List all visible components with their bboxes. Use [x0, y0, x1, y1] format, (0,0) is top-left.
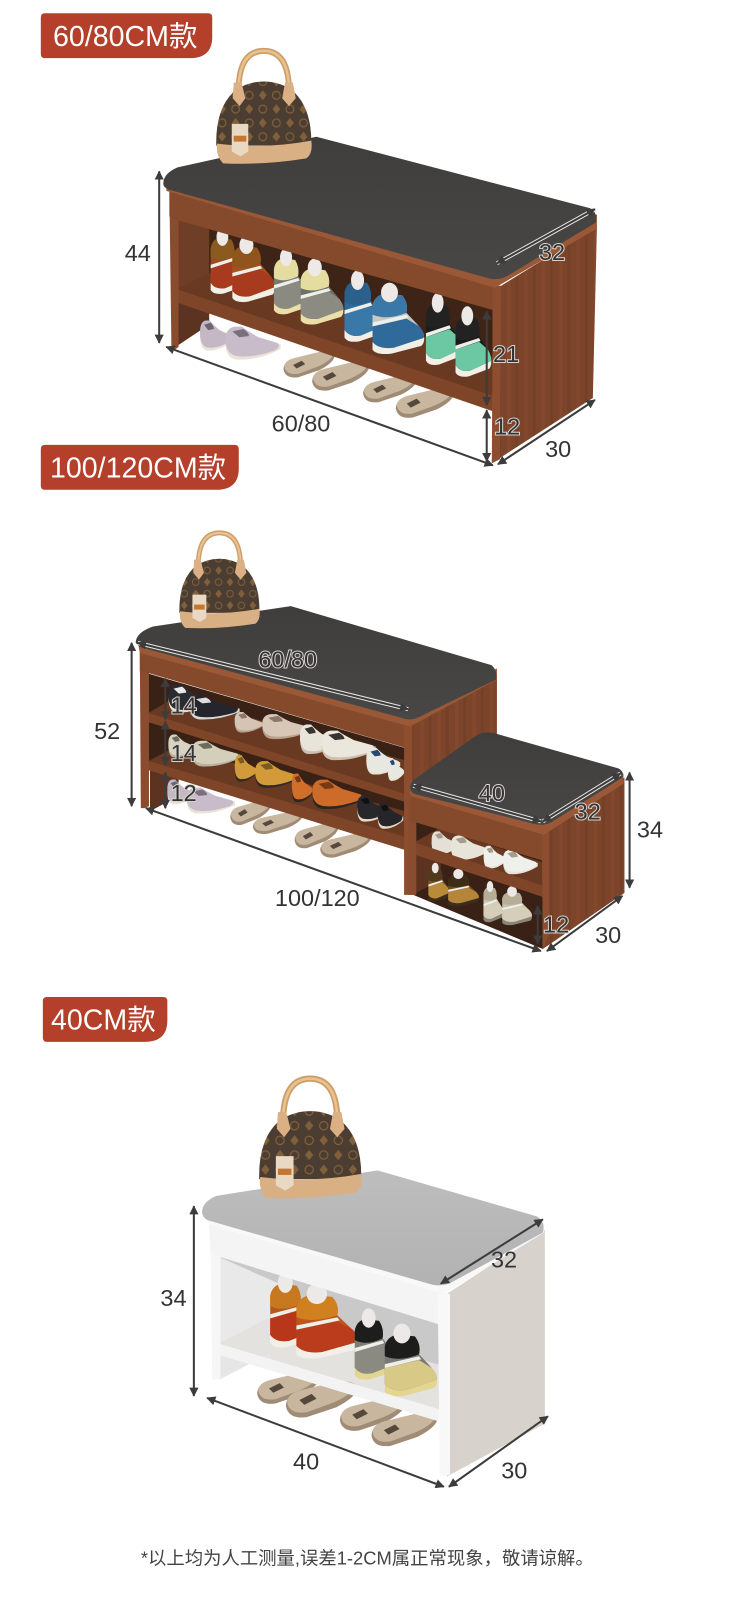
handbag 2: [179, 533, 260, 628]
handbag 1: [216, 51, 312, 164]
dimension: 14 middle: [165, 721, 197, 766]
dimension: 32 seat: 32: [539, 239, 565, 265]
dimension: 21: 21: [493, 341, 519, 367]
dimension: 12: [487, 410, 520, 461]
stool apron: [410, 794, 545, 861]
dimension: 30: 30: [501, 1458, 527, 1484]
side panel: [408, 676, 497, 816]
divider post: [404, 722, 412, 895]
stool interior: [413, 811, 543, 949]
apron: [169, 191, 497, 311]
badge: 60/80CM款: [41, 13, 212, 58]
shelf front: [216, 1343, 439, 1421]
dimension: 100/120: [146, 808, 541, 951]
seat trim: [166, 182, 597, 288]
bench: 40cm white: [202, 1170, 545, 1477]
dimension: 34: 34: [160, 1285, 187, 1311]
interior back: [148, 673, 405, 839]
side panel: [447, 1230, 545, 1477]
dimension: 30 side: 30: [545, 436, 571, 462]
stool left post: [408, 794, 416, 895]
badge: 100/120CM款: [41, 445, 239, 490]
dimension: 44: 44: [125, 240, 151, 266]
dimension: 12 bottom: 12: [171, 780, 197, 806]
stool shelf front: [413, 842, 543, 897]
seat cushion: [202, 1170, 544, 1285]
dimension: 12 stool: [538, 906, 569, 944]
dimension: 32: 32: [491, 1246, 517, 1272]
shoes: [167, 685, 404, 858]
dimension: 30 stool: [547, 896, 622, 951]
dimension: 32 stool seat: 32: [575, 798, 601, 824]
dimension: 60/80: 60/80: [272, 411, 330, 437]
dimension: 32 stool seat: [543, 773, 620, 824]
badge: 60/80CM款: 60/80CM款: [53, 21, 198, 53]
left post: [140, 647, 149, 808]
front post: [438, 1294, 450, 1477]
shoes under shelf: [200, 320, 454, 418]
dimension: 12 stool: 12: [543, 912, 569, 938]
stool side: [543, 778, 624, 949]
stool trim: [410, 773, 623, 835]
stool shoes: [428, 831, 538, 925]
dimension: 12 bottom: [165, 772, 197, 808]
stool cushion: [410, 732, 623, 825]
dimension: 30 side: [498, 400, 595, 464]
dimension: 34 stool: 34: [637, 817, 663, 843]
dimension: 60/80 seat: [138, 643, 408, 709]
left inner side: [176, 212, 209, 291]
back interior: [219, 1250, 441, 1406]
dimension: 40: [207, 1398, 444, 1487]
seat rim: [203, 1214, 544, 1294]
badge: 100/120CM款: 100/120CM款: [50, 453, 226, 485]
shelf surfaces: [148, 697, 405, 795]
seat cushion: [163, 137, 596, 279]
shelf surface: [176, 272, 493, 400]
dimension: 60/80 seat: 60/80: [258, 646, 317, 672]
shoes: [257, 1272, 438, 1446]
dimension: 21: [487, 311, 519, 405]
apron: [140, 647, 406, 748]
stool front post: [542, 833, 549, 949]
dimension: 60/80: [166, 347, 493, 465]
dimension: 14 top: [165, 679, 197, 719]
dimension: 40 seat: 40: [479, 780, 505, 806]
shelf front: [176, 289, 493, 411]
shoes upper row: [211, 228, 491, 377]
back interior: [179, 214, 493, 398]
inner left: [219, 1257, 284, 1347]
shelf surface: [216, 1316, 441, 1410]
bench: 60/80cm: [163, 137, 597, 463]
dimension: 40: 40: [293, 1448, 319, 1474]
dimension: 32: [441, 1219, 543, 1284]
dimension: 30: [449, 1416, 548, 1487]
dimension: 30 stool: 30: [595, 922, 621, 948]
badge: 40CM款: 40CM款: [51, 1005, 156, 1037]
shelf fronts: [146, 712, 405, 802]
lower inner left: [219, 1353, 270, 1380]
dimension: 12: 12: [494, 414, 520, 440]
bench: 100/120cm: [136, 606, 497, 895]
dimension: 14 middle: 14: [171, 740, 197, 766]
dimension: 100/120: 100/120: [275, 885, 360, 911]
side panel: [492, 227, 597, 463]
dimension: 34 stool: [630, 772, 663, 888]
left post: [210, 1224, 220, 1380]
small stool: [408, 732, 624, 949]
footnote: *以上均为人工测量,误差1-2CM属正常现象，敬请谅解。: [141, 1547, 594, 1568]
handbag 3: [259, 1079, 362, 1198]
badge: 40CM款: [43, 997, 167, 1042]
dimension: 52: 52: [94, 718, 120, 744]
apron: [209, 1222, 446, 1327]
front post: [492, 286, 501, 463]
seat cushion: [136, 606, 496, 719]
seat trim: [138, 641, 497, 727]
dimension: 14 top: 14: [171, 692, 197, 718]
left lower side: [150, 767, 179, 811]
dimension: 40 seat: [413, 780, 541, 821]
left post: [169, 192, 179, 349]
dimension: 32 seat: [497, 209, 595, 265]
